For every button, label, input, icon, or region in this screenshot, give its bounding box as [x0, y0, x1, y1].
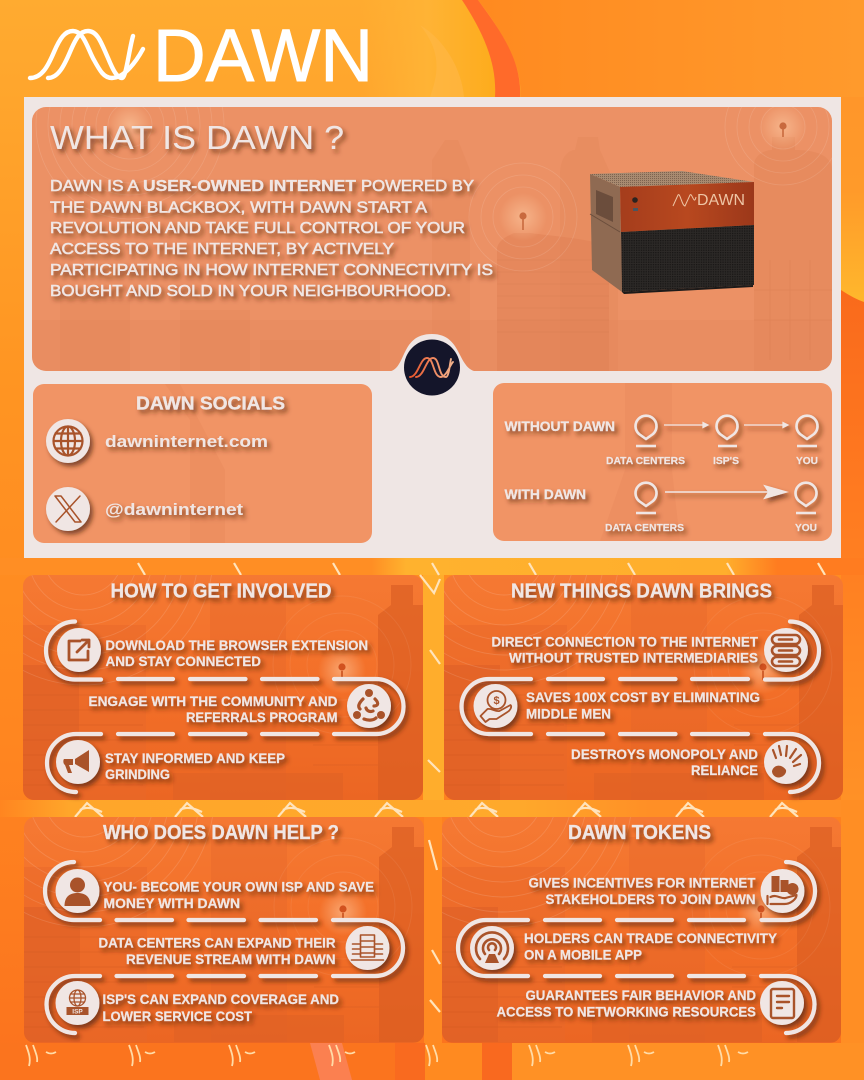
text: trade: ON A MOBILE APP	[524, 946, 642, 962]
text: fair behavior	[496, 987, 756, 1020]
text: data centers: REVENUE STREAM WITH DAWN	[126, 951, 336, 967]
heading and text: what is DAWN	[50, 120, 493, 300]
text: benefit 1: DIRECT CONNECTION TO THE INTERNET	[492, 634, 758, 650]
text: ISPs	[102, 991, 339, 1024]
icon: ISP globe: ISP	[72, 1008, 83, 1016]
icon: megaphone	[56, 740, 100, 784]
panel: with and without DAWN diagram	[493, 383, 832, 541]
heading: NEW THINGS DAWN BRINGS	[511, 580, 772, 602]
text: fair behavior: ACCESS TO NETWORKING RESOURCES	[496, 1004, 756, 1020]
icon: globe	[46, 419, 90, 463]
text block: description: PARTICIPATING IN HOW INTERNET CONNECTIVITY IS	[50, 262, 493, 279]
white frame	[24, 97, 841, 558]
heading: WHAT IS DAWN ?	[50, 120, 344, 157]
text: incentives: STAKEHOLDERS TO JOIN DAWN	[546, 891, 756, 907]
icon: DAWN wave mark	[30, 31, 143, 78]
text: trade: HOLDERS CAN TRADE CONNECTIVITY	[524, 930, 778, 946]
text: data centers	[98, 934, 336, 967]
text: step 3: STAY INFORMED AND KEEP	[105, 750, 285, 766]
wordmark text: DAWN	[153, 14, 373, 97]
text: step 2: REFERRALS PROGRAM	[186, 709, 338, 725]
text: benefit 1	[492, 634, 758, 666]
label: without DAWN: WITHOUT DAWN	[504, 419, 615, 434]
label: data centers: DATA CENTERS	[606, 455, 685, 467]
icon: pin you	[797, 416, 818, 446]
text: ISPs: LOWER SERVICE COST	[102, 1008, 252, 1024]
icon: ISP globe	[56, 981, 100, 1025]
image: DAWN blackbox	[590, 171, 754, 294]
text: step 3	[105, 750, 285, 782]
icon: pin you	[796, 483, 816, 513]
text: you	[104, 878, 374, 911]
text: step 2	[88, 693, 338, 725]
text: incentives	[528, 874, 756, 907]
icon: pin data centers	[636, 483, 656, 513]
heading: DAWN TOKENS	[568, 822, 711, 844]
arrow: ISP to you	[744, 422, 788, 428]
arrow: data centers to ISP	[664, 422, 708, 428]
text: you: YOU- BECOME YOUR OWN ISP AND SAVE	[104, 878, 374, 894]
connector path	[458, 862, 815, 1033]
icon: external link	[57, 628, 101, 672]
text: benefit 3: DESTROYS MONOPOLY AND	[571, 746, 758, 762]
text: step 1: AND STAY CONNECTED	[106, 653, 261, 669]
panel: DAWN tokens	[442, 817, 841, 1043]
text block: description: DAWN IS A	[50, 178, 139, 195]
text: ISPs: ISP'S CAN EXPAND COVERAGE AND	[102, 991, 339, 1007]
heading: HOW TO GET INVOLVED	[110, 580, 332, 602]
panel: what is DAWN	[32, 107, 832, 371]
notch behind logo badge	[386, 334, 480, 372]
text block: description	[50, 178, 493, 300]
text: step 1	[106, 637, 368, 669]
label: ISP: ISP'S	[713, 455, 739, 467]
heading: WHO DOES DAWN HELP ?	[103, 822, 339, 844]
icon: document	[760, 981, 804, 1025]
panel: who does DAWN help	[24, 817, 424, 1043]
text: step 1: DOWNLOAD THE BROWSER EXTENSION	[106, 637, 368, 653]
text: incentives: GIVES INCENTIVES FOR INTERNET	[528, 874, 756, 890]
icon: pin ISP	[717, 416, 738, 446]
text: step 2: ENGAGE WITH THE COMMUNITY AND	[88, 693, 338, 709]
text: benefit 3: RELIANCE	[691, 762, 758, 778]
text block: description: BOUGHT AND SOLD IN YOUR NEIGHBOURHOOD.	[50, 283, 451, 300]
panel: new things DAWN brings	[444, 575, 843, 800]
text block: description: REVOLUTION AND TAKE FULL CONTROL OF YOUR	[50, 220, 465, 237]
text: benefit 2	[526, 689, 760, 722]
label: with DAWN: WITH DAWN	[504, 487, 586, 502]
connector path	[462, 622, 819, 792]
link: website: dawninternet.com	[105, 432, 268, 451]
logo badge	[404, 340, 460, 396]
icon: user	[56, 869, 100, 913]
icon: broadcast	[470, 926, 514, 970]
icon: explosion	[764, 740, 808, 784]
text: step 3: GRINDING	[105, 766, 170, 782]
connector path	[45, 862, 403, 1033]
logo: DAWN wordmark	[30, 14, 373, 97]
text: benefit 2: SAVES 100X COST BY ELIMINATING	[526, 689, 760, 705]
image: DAWN blackbox: DAWN	[697, 192, 745, 209]
text block: description: ACCESS TO THE INTERNET, BY ACTIVELY	[50, 241, 394, 258]
text block: description: THE DAWN BLACKBOX, WITH DAWN START A	[50, 200, 427, 216]
text: benefit 1: WITHOUT TRUSTED INTERMEDIARIES	[509, 650, 758, 666]
icon: data center	[346, 926, 390, 970]
icon: gift and hand	[760, 869, 804, 913]
label: data centers: DATA CENTERS	[605, 522, 684, 534]
text: trade	[524, 930, 778, 962]
text block: description: USER-OWNED INTERNET	[143, 178, 356, 195]
arrow: data centers to you	[665, 486, 786, 498]
icon: hand saving money	[474, 684, 518, 728]
text: fair behavior: GUARANTEES FAIR BEHAVIOR AND	[526, 987, 756, 1003]
icon: servers	[764, 628, 808, 672]
panel: DAWN socials	[33, 384, 372, 543]
text: you: MONEY WITH DAWN	[104, 895, 240, 911]
panel: how to get involved	[23, 575, 423, 800]
text: data centers: DATA CENTERS CAN EXPAND THEIR	[98, 934, 336, 950]
heading: DAWN SOCIALS	[136, 394, 285, 414]
icon: pin data centers	[636, 416, 656, 446]
text: benefit 3	[571, 746, 758, 778]
text: benefit 2: MIDDLE MEN	[526, 706, 611, 722]
icon: hand saving money: $	[493, 695, 500, 707]
icon: community	[347, 684, 391, 728]
label: you: YOU	[795, 522, 817, 534]
text block: description: POWERED BY	[361, 178, 474, 195]
label: you: YOU	[796, 455, 818, 467]
link: X handle: @dawninternet	[105, 500, 243, 519]
icon: X	[46, 487, 90, 531]
connector path	[46, 622, 403, 792]
